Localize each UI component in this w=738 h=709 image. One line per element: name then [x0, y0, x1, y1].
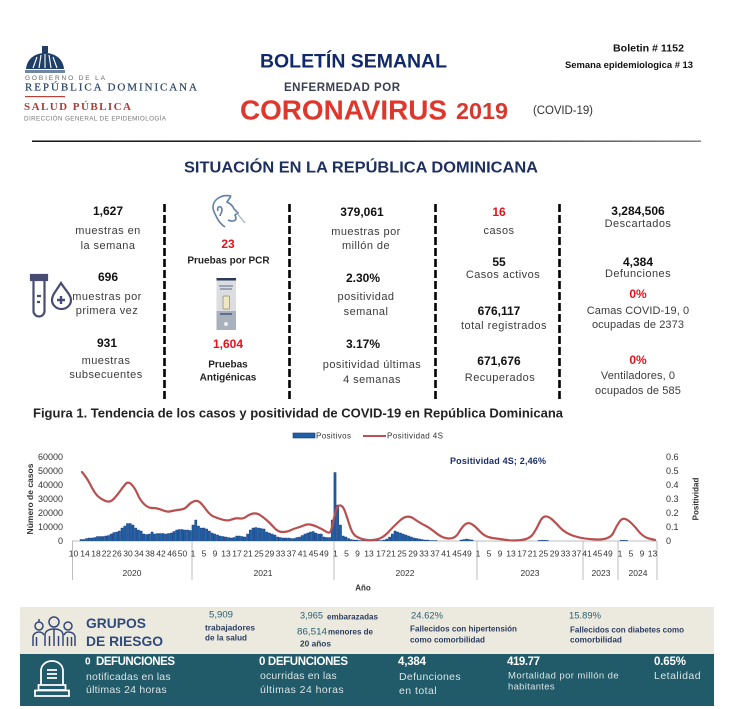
x axis week labels: 1: [618, 548, 623, 558]
line: positividad 4S: [82, 472, 655, 540]
x axis week labels: [69, 548, 657, 558]
x axis week labels: 38: [145, 548, 155, 558]
panel: defunciones: últimas 24 horas: [260, 684, 344, 696]
panel: muestras: muestras: [82, 355, 130, 367]
legend: Positividad 4S: [387, 432, 443, 440]
panel: grupos de riesgo: 15.89%: [569, 610, 602, 622]
x axis week labels: 37: [287, 548, 296, 558]
panel: defunciones: Defunciones: [399, 671, 461, 683]
bars: positivos: [80, 472, 628, 541]
panel: descartados y hospitalización: ocupados de 585: [595, 385, 681, 397]
x axis week labels: 21: [386, 548, 396, 558]
panel: defunciones: 0 DEFUNCIONES: [259, 656, 348, 668]
panel: grupos de riesgo: 20 años: [300, 640, 332, 648]
panel: muestras: 696: [98, 270, 118, 284]
panel: grupos de riesgo: GRUPOS: [86, 615, 146, 631]
panel: muestras: 931: [97, 336, 117, 350]
x axis week labels: 5: [344, 548, 349, 558]
x axis week labels: 50: [178, 548, 187, 558]
right axis labels: 0.6: [666, 452, 679, 462]
bulletin number: [565, 44, 693, 70]
right axis labels: 0.5: [666, 466, 679, 476]
right axis labels: 0.1: [666, 522, 679, 532]
x axis week labels: 29: [550, 548, 559, 558]
figure heading: Figura 1. Tendencia de los casos y positividad de COVID-19 en República Dominicana: [33, 406, 564, 420]
left axis labels: 50000: [38, 466, 63, 476]
panel: defunciones: 419.77: [507, 656, 540, 668]
panel: casos: 16: [492, 205, 506, 219]
right axis labels: 0.2: [666, 508, 679, 518]
right axis labels: 0: [666, 536, 671, 546]
panel: muestras: muestras en: [75, 225, 141, 237]
panel: grupos de riesgo: Fallecidos con hipertensión: [410, 624, 517, 634]
panel: muestras por millón y positividad: positividad: [338, 291, 394, 303]
panel: muestras por millón y positividad: 3.17%: [346, 337, 380, 351]
panel: muestras por millón y positividad: positividad últimas: [323, 359, 421, 371]
panel: grupos de riesgo: menores de: [328, 628, 374, 636]
panel: defunciones: 4,384: [398, 656, 427, 668]
x axis week labels: 29: [265, 548, 274, 558]
panel: casos: total registrados: [461, 320, 547, 332]
x axis week labels: 41: [582, 548, 592, 558]
panel: pruebas: 23: [221, 237, 235, 251]
x axis week labels: 25: [254, 548, 264, 558]
panel: grupos de riesgo: [20, 607, 714, 654]
logo: Gobierno de la República Dominicana: [24, 46, 197, 122]
right axis labels: Positividad: [692, 478, 700, 520]
panel: grupos de riesgo: de la salud: [205, 634, 247, 642]
panel: descartados y hospitalización: ocupadas de 2373: [592, 319, 684, 331]
panel: pruebas: [187, 196, 270, 384]
panel: defunciones: Mortalidad por millón de: [508, 670, 619, 682]
panel: muestras por millón y positividad: 379,061: [340, 205, 384, 219]
right axis labels: [666, 452, 700, 546]
x axis week labels: 17: [232, 548, 242, 558]
header title block: (COVID-19): [533, 105, 593, 117]
header title block: CORONAVIRUS: [240, 94, 447, 126]
panel: muestras: [31, 204, 143, 381]
logo: Gobierno de la República Dominicana: GOBIERNO DE LA: [25, 75, 106, 82]
icon: test tube and blood drop: [31, 275, 71, 316]
x axis week labels: 33: [419, 548, 429, 558]
x axis week labels: 41: [298, 548, 307, 558]
panel: grupos de riesgo: 24.62%: [411, 610, 444, 622]
x axis week labels: 45: [593, 548, 602, 558]
icon: nasal swab head: [213, 196, 245, 227]
section heading: SITUACIÓN EN LA REPÚBLICA DOMINICANA: [184, 158, 538, 176]
panel: casos: casos: [484, 225, 515, 237]
x axis year labels: 2024: [629, 568, 648, 578]
icon: dome: [25, 46, 65, 73]
panel: casos: Casos activos: [466, 269, 540, 281]
panel: grupos de riesgo: 5,909: [209, 610, 233, 620]
x axis week labels: 17: [376, 548, 386, 558]
x axis year labels: 2023: [592, 568, 611, 578]
left axis labels: 10000: [38, 522, 63, 532]
panel: muestras: 1,627: [93, 204, 123, 218]
logo: Gobierno de la República Dominicana: DIRECCIÓN GENERAL DE EPIDEMIOLOGÍA: [24, 114, 167, 122]
x axis week labels: 30: [123, 548, 133, 558]
panel: casos: 676,117: [478, 304, 521, 318]
x axis week labels: 41: [441, 548, 451, 558]
panel: descartados y hospitalización: Defunciones: [605, 268, 671, 280]
panel: descartados y hospitalización: Descartados: [605, 218, 671, 230]
x axis week labels: 5: [629, 548, 634, 558]
panel: grupos de riesgo: DE RIESGO: [86, 633, 163, 649]
panel: grupos de riesgo: embarazadas: [327, 612, 379, 622]
panel: defunciones: DEFUNCIONES: [96, 656, 175, 668]
panel: pruebas: Antigénicas: [200, 372, 257, 384]
logo: Gobierno de la República Dominicana: REPÚBLICA DOMINICANA: [25, 82, 197, 94]
x axis week labels: 9: [498, 548, 503, 558]
panel: muestras: muestras por: [72, 291, 142, 303]
panel: defunciones: [20, 654, 714, 706]
x axis week labels: 33: [276, 548, 285, 558]
panel: defunciones: notificadas en las: [86, 671, 171, 683]
panel: pruebas: 1,604: [213, 337, 243, 351]
x axis week labels: 17: [517, 548, 527, 558]
icon: tombstone: [35, 661, 69, 696]
x axis week labels: 49: [603, 548, 613, 558]
header title block: [240, 50, 593, 126]
x axis year labels: Año: [355, 584, 371, 592]
x axis week labels: 34: [134, 548, 144, 558]
panel: defunciones: últimas 24 horas: [86, 684, 167, 696]
x axis week labels: 5: [202, 548, 207, 558]
x axis week labels: 13: [364, 548, 374, 558]
legend: Positivos: [316, 432, 351, 440]
x axis week labels: 5: [487, 548, 492, 558]
x axis week labels: 22: [102, 548, 111, 558]
x axis week labels: 14: [80, 548, 90, 558]
panel: muestras por millón y positividad: 2.30%: [346, 271, 380, 285]
x axis week labels: 9: [355, 548, 360, 558]
x axis week labels: 46: [167, 548, 177, 558]
panel: muestras por millón y positividad: muestras por: [331, 226, 401, 238]
x axis week labels: 1: [333, 548, 338, 558]
x axis year labels: 2022: [396, 568, 415, 578]
x axis week labels: 13: [648, 548, 657, 558]
panel: grupos de riesgo: comorbilidad: [570, 636, 622, 644]
panel: muestras por millón y positividad: millón de: [342, 240, 390, 252]
x axis week labels: 13: [506, 548, 516, 558]
x axis week labels: 21: [243, 548, 253, 558]
logo: Gobierno de la República Dominicana: SALUD PÚBLICA: [24, 101, 131, 113]
x axis week labels: 45: [452, 548, 462, 558]
icon: antigen test device: [216, 278, 236, 330]
icon: people: [33, 617, 75, 646]
panel: muestras por millón y positividad: semanal: [344, 306, 388, 318]
x axis week labels: 33: [561, 548, 570, 558]
left axis labels: 60000: [38, 452, 63, 462]
panel: casos: [461, 205, 547, 384]
header title block: ENFERMEDAD POR: [284, 82, 401, 94]
bulletin number: Boletin # 1152: [613, 44, 684, 54]
x axis year labels: [123, 568, 648, 592]
x axis week labels: 13: [221, 548, 231, 558]
x axis year labels: 2023: [521, 568, 540, 578]
left axis labels: 0: [58, 536, 63, 546]
right axis labels: 0.4: [666, 480, 679, 490]
panel: pruebas: Pruebas por PCR: [187, 256, 270, 266]
panel: muestras por millón y positividad: [323, 205, 421, 386]
x axis week labels: 49: [462, 548, 472, 558]
x axis week labels: 49: [319, 548, 329, 558]
x axis week labels: 18: [91, 548, 101, 558]
panel: descartados y hospitalización: 0%: [629, 353, 647, 367]
x axis week labels: 37: [572, 548, 581, 558]
panel: defunciones: en total: [399, 685, 437, 697]
panel: defunciones: 0: [85, 656, 91, 668]
x axis year labels: 2020: [123, 568, 142, 578]
panel: casos: Recuperados: [465, 372, 535, 384]
panel: descartados y hospitalización: Camas COVID-19, 0: [587, 305, 689, 317]
x axis week labels: 10: [69, 548, 78, 558]
x axis week labels: 26: [112, 548, 122, 558]
right axis labels: 0.3: [666, 494, 679, 504]
panel: grupos de riesgo: como comorbilidad: [410, 636, 485, 644]
header title block: 2019: [456, 98, 508, 124]
x axis week labels: 25: [539, 548, 548, 558]
x axis week labels: 42: [156, 548, 166, 558]
left axis labels: Número de casos: [25, 463, 35, 534]
x axis year labels: 2021: [254, 568, 273, 578]
panel: grupos de riesgo: 3,965: [300, 610, 323, 622]
panel: muestras: subsecuentes: [69, 369, 143, 381]
x axis week labels: 25: [397, 548, 407, 558]
panel: grupos de riesgo: 86,514: [297, 626, 327, 638]
left axis labels: [25, 452, 63, 546]
panel: descartados y hospitalización: 3,284,506: [611, 204, 665, 218]
panel: muestras por millón y positividad: 4 semanas: [343, 374, 401, 386]
chart: casos y positividad: [25, 432, 700, 592]
legend: [293, 432, 443, 440]
x axis week labels: 9: [213, 548, 218, 558]
left axis labels: 30000: [38, 494, 63, 504]
panel: muestras: primera vez: [76, 305, 138, 317]
left axis labels: 40000: [38, 480, 63, 490]
x axis week labels: 37: [430, 548, 440, 558]
panel: grupos de riesgo: Fallecidos con diabetes como: [570, 626, 684, 634]
panel: defunciones: 0.65%: [654, 656, 686, 668]
x axis week labels: 29: [408, 548, 418, 558]
panel: descartados y hospitalización: Ventiladores, 0: [601, 370, 675, 382]
panel: grupos de riesgo: trabajadores: [205, 624, 256, 632]
panel: casos: 55: [492, 255, 506, 269]
annotation: positividad 4S: Positividad 4S; 2,46%: [450, 456, 546, 466]
header title block: BOLETÍN SEMANAL: [260, 50, 447, 72]
panel: muestras: la semana: [81, 240, 136, 252]
x axis week labels: 1: [476, 548, 481, 558]
x axis week labels: 1: [191, 548, 196, 558]
left axis labels: 20000: [38, 508, 63, 518]
panel: casos: 671,676: [477, 354, 521, 368]
panel: defunciones: Letalidad: [654, 670, 701, 682]
x axis week labels: 21: [528, 548, 537, 558]
x axis week labels: 45: [309, 548, 318, 558]
panel: pruebas: Pruebas: [208, 360, 248, 370]
panel: defunciones: habitantes: [508, 682, 555, 692]
panel: descartados y hospitalización: [587, 204, 689, 397]
panel: defunciones: ocurridas en las: [260, 670, 337, 682]
x axis week labels: 9: [640, 548, 645, 558]
panel: descartados y hospitalización: 4,384: [623, 255, 653, 269]
bulletin number: Semana epidemiologica # 13: [565, 60, 693, 70]
panel: descartados y hospitalización: 0%: [629, 287, 647, 301]
